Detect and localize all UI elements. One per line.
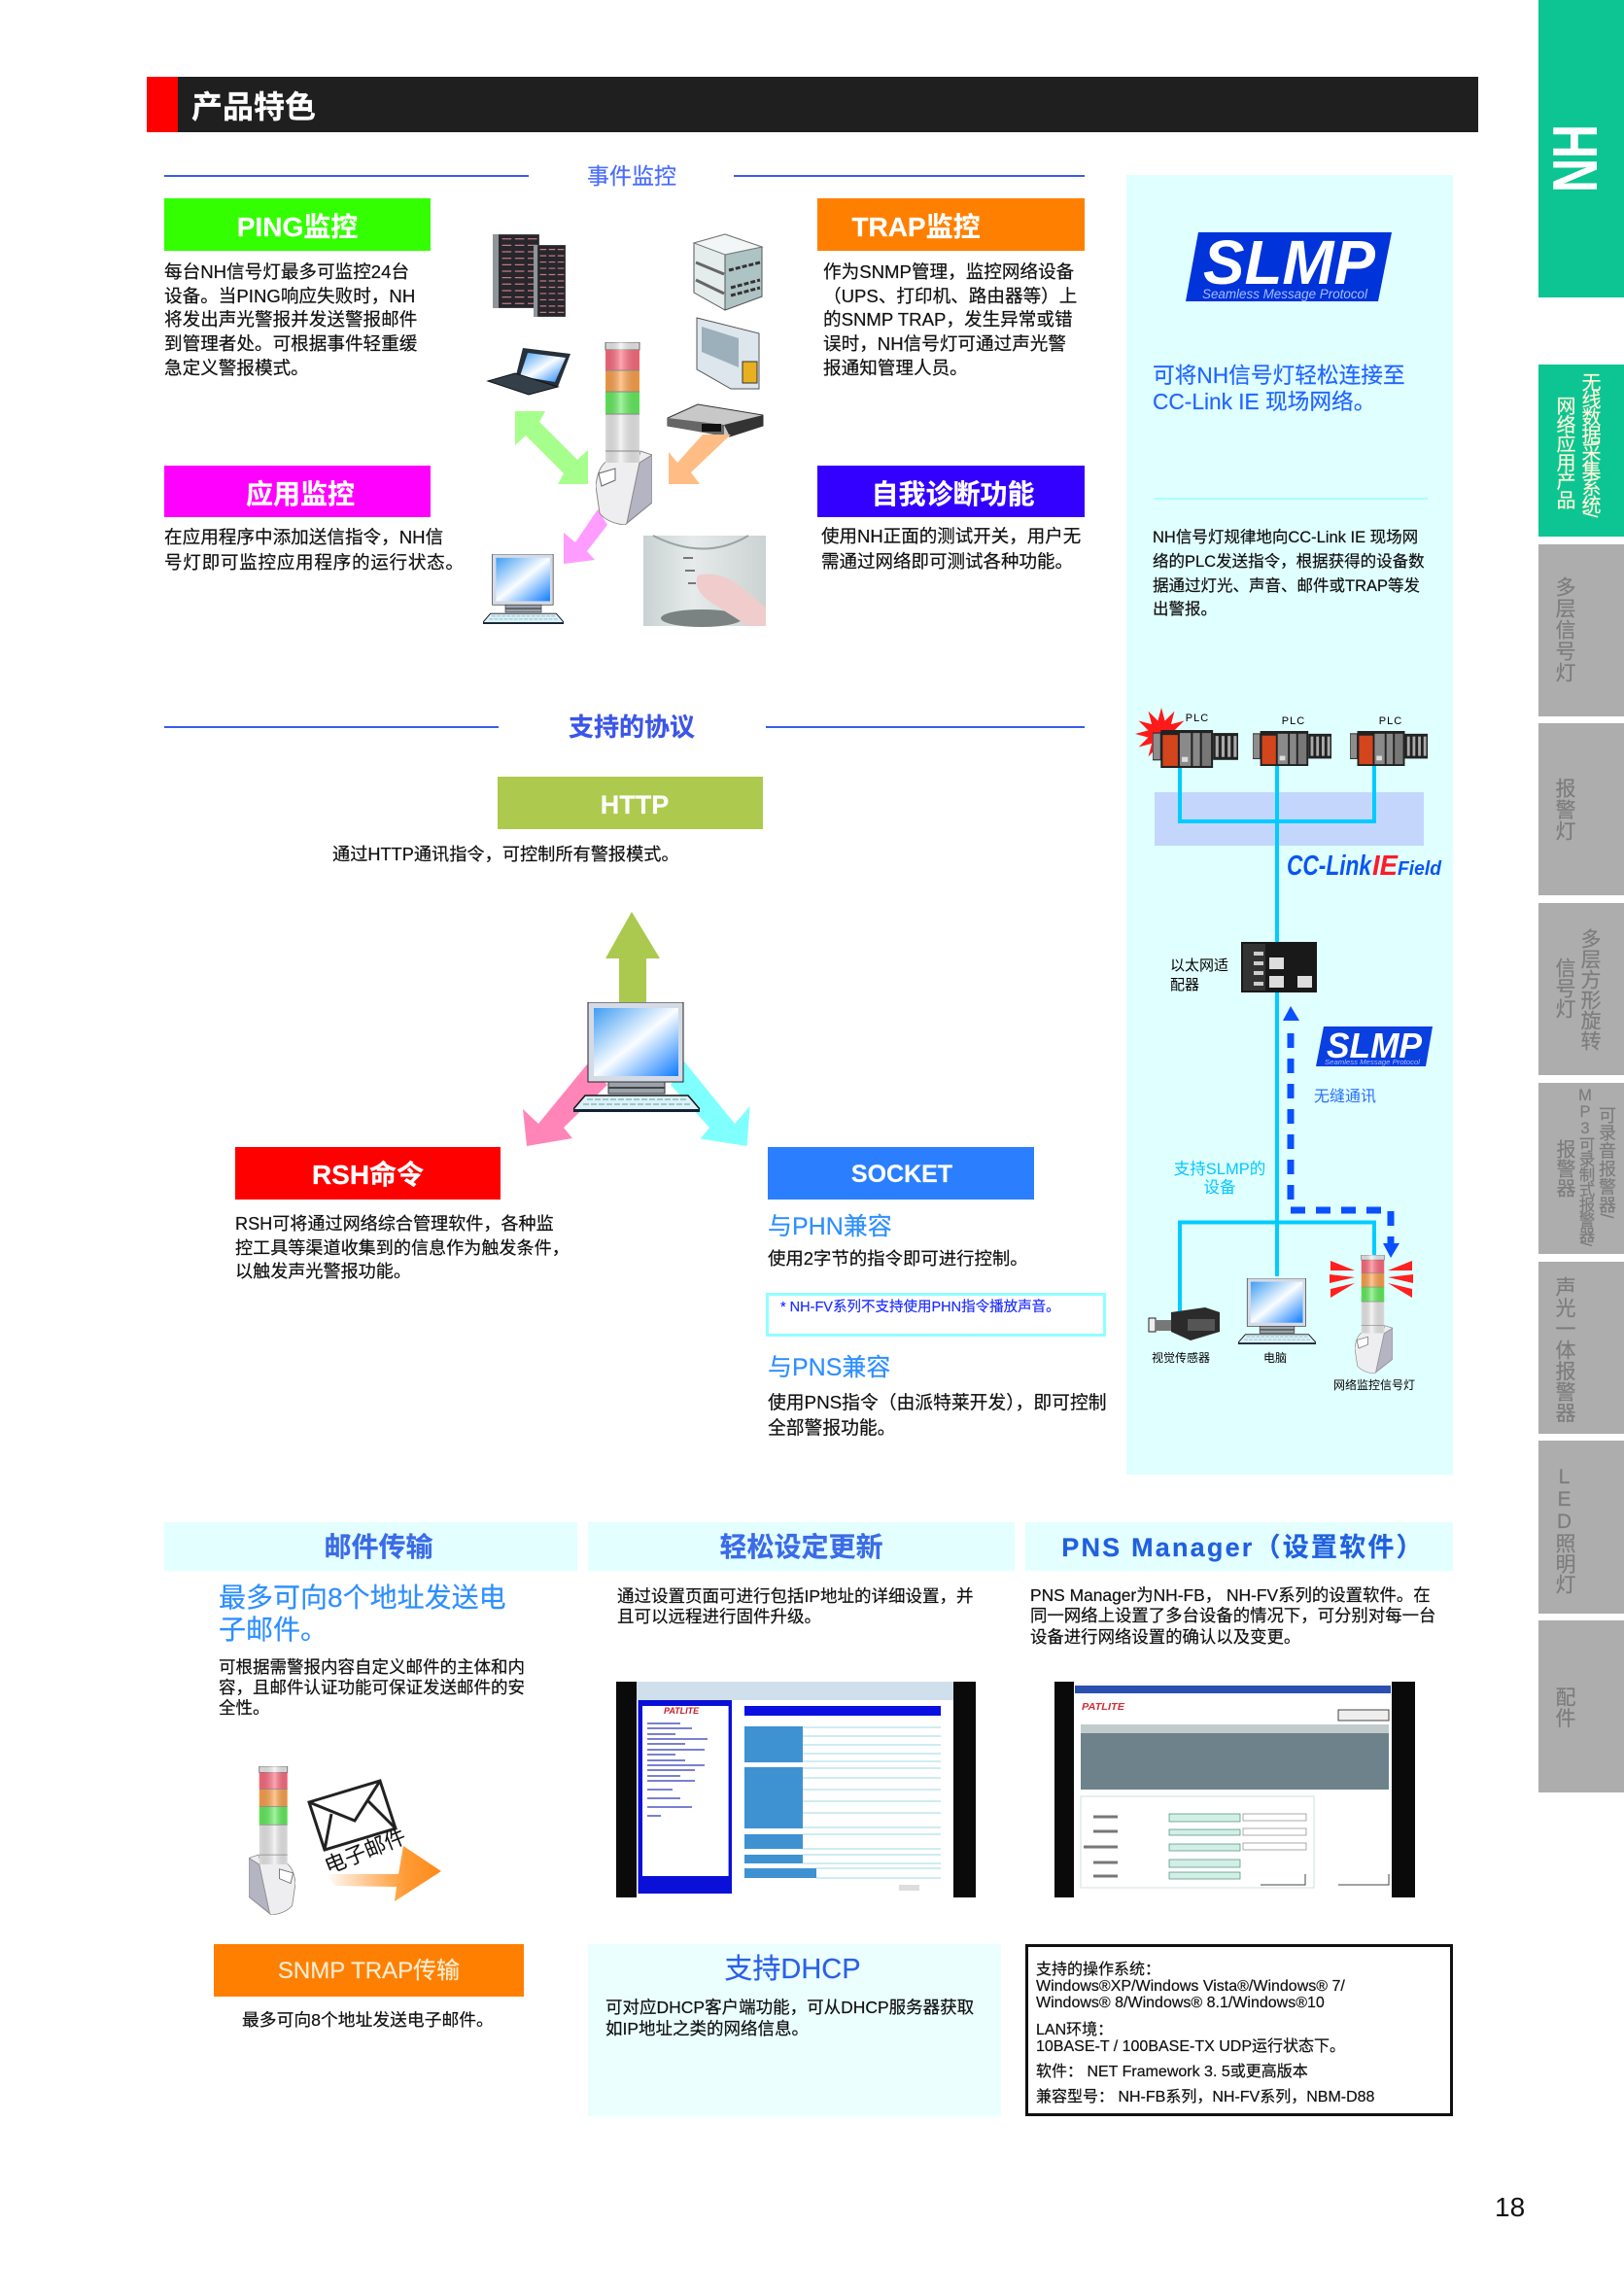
text: self diagnosis description: 使用NH正面的测试开关，用户无 — [821, 526, 1081, 546]
subheading: 支持的协议: 支持的协议 — [569, 713, 695, 742]
icon: envelope — [309, 1781, 396, 1850]
banner: SOCKET: SOCKET — [851, 1161, 952, 1188]
illustration: event monitoring diagram — [483, 233, 766, 627]
panel: SLMP — [1126, 175, 1453, 1475]
heading: 支持DHCP: 支持DHCP — [724, 1954, 861, 1985]
icon: network switch — [668, 404, 763, 436]
text: LAN environment — [1036, 2021, 1345, 2055]
logo: SLMP: Seamless Message Protocol — [1202, 287, 1368, 301]
arrow: double green — [515, 411, 588, 484]
tab: 配件 — [1538, 1620, 1624, 1792]
text: PING description: 将发出声光警报并发送警报邮件 — [164, 309, 417, 330]
banner: TRAP监控 — [817, 198, 1085, 251]
page number: 18 — [1495, 2192, 1525, 2222]
text: settings description: 且可以远程进行固件升级。 — [617, 1606, 821, 1625]
screenshot: web configuration page — [616, 1682, 976, 1897]
label: email: 电子邮件 — [321, 1824, 409, 1879]
icon: computer — [1238, 1278, 1316, 1344]
tab: 无线数据采集系统/网络应用产品: 网络应用产品 — [1553, 396, 1574, 508]
text: PING description: 设备。当PING响应失败时，NH — [164, 286, 415, 306]
tab: NH active — [1538, 0, 1624, 297]
text: PNS description — [768, 1392, 1107, 1438]
panel: HTTP — [332, 777, 763, 864]
heading: send to 8 addresses: 子邮件。 — [219, 1615, 328, 1645]
tab: 报警灯: 报警灯 — [1553, 778, 1575, 842]
logo: CC-Link IE Field: IE — [1372, 851, 1399, 882]
tab: 声光一体报警器 — [1538, 1262, 1624, 1434]
text: TRAP description — [823, 261, 1077, 378]
side navigation tabs — [1538, 0, 1624, 1792]
panel: system requirements — [1025, 1944, 1453, 2116]
image: finger pressing test switch — [643, 536, 766, 627]
banner: 应用监控: 应用监控 — [246, 479, 355, 509]
icon: server racks — [493, 234, 566, 317]
text: SLMP description — [1153, 529, 1425, 618]
text: PNS description: 使用PNS指令（由派特莱开发），即可控制 — [768, 1392, 1107, 1412]
tab: 多层方形旋转信号灯 — [1538, 903, 1624, 1075]
panel: RSH命令 — [235, 1147, 570, 1281]
tab: 报警灯 — [1538, 723, 1624, 895]
tab: MP3可录制式报警器: MP3 可录制式报警器/ — [1576, 1087, 1594, 1245]
header band — [588, 1522, 1015, 1571]
text: compatible models: 兼容型号： NH-FB系列，NH-FV系列，NBM-D88 — [1036, 2089, 1374, 2105]
panel: 支持DHCP — [588, 1944, 1001, 2116]
column: PNS Manager — [1025, 1522, 1453, 1647]
text: TRAP description: 的SNMP TRAP，发生异常或错 — [823, 309, 1073, 330]
logo: CC-Link IE Field: Field — [1398, 858, 1442, 880]
arrow: orange — [669, 435, 731, 484]
heading: connect to CC-Link IE — [1153, 363, 1405, 414]
text: supported OS — [1036, 1961, 1345, 2011]
section heading bar: 产品特色 — [147, 77, 1478, 132]
banner: HTTP: HTTP — [601, 790, 669, 819]
text: PHN description: 使用2字节的指令即可进行控制。 — [768, 1248, 1028, 1269]
arrow: dashed SLMP route — [1283, 1006, 1399, 1258]
screenshot: PNS Manager window: PATLITE — [1082, 1702, 1124, 1713]
icon: vision sensor — [1149, 1307, 1220, 1340]
tab: 无线数据采集系统/网络应用产品 — [1538, 365, 1624, 537]
text: email description: 可根据需警报内容自定义邮件的主体和内 — [219, 1657, 525, 1677]
tab: 多层信号灯: 多层信号灯 — [1553, 576, 1575, 683]
text: email description — [219, 1657, 525, 1718]
banner: 自我诊断功能: 自我诊断功能 — [871, 479, 1034, 509]
red marker — [147, 77, 178, 132]
tab: LED照明灯 — [1538, 1441, 1624, 1614]
label: ethernet adapter: 以太网适 — [1170, 957, 1228, 974]
heading: send to 8 addresses: 最多可向8个地址发送电 — [219, 1583, 506, 1613]
text: settings description — [617, 1586, 974, 1625]
label: ethernet adapter: 配器 — [1170, 977, 1199, 993]
text: DHCP description: 可对应DHCP客户端功能，可从DHCP服务器获取 — [605, 1998, 974, 2017]
text: PNS Manager description: 同一网络上设置了多台设备的情况下，可分别对每一台 — [1030, 1606, 1435, 1625]
heading: connect to CC-Link IE: 可将NH信号灯轻松连接至 — [1153, 363, 1405, 388]
text: email description: 容，且邮件认证功能可保证发送邮件的安 — [219, 1678, 525, 1697]
text: supported OS: Windows®XP/Windows Vista®/Windows® 7/ — [1036, 1978, 1345, 1995]
banner: SOCKET — [768, 1147, 1034, 1200]
column: 轻松设定更新 — [588, 1522, 1015, 2116]
label: network signal tower: 网络监控信号灯 — [1333, 1377, 1415, 1392]
PLC units: PLC — [1186, 713, 1209, 724]
text: SLMP description: 据通过灯光、声音、邮件或TRAP等发 — [1153, 577, 1420, 595]
heading: connect to CC-Link IE: CC-Link IE 现场网络。 — [1153, 389, 1375, 414]
note box — [766, 1293, 1106, 1337]
text: supported OS: Windows® 8/Windows® 8.1/Windows®10 — [1036, 1995, 1325, 2011]
text: PNS Manager description: 设备进行网络设置的确认以及变更。 — [1030, 1627, 1300, 1647]
heading: PNS compatible: 与PNS兼容 — [768, 1354, 890, 1381]
network diagram — [1135, 708, 1442, 1392]
tab: MP3可录制式报警器 — [1538, 1083, 1624, 1254]
text: SLMP description: 出警报。 — [1153, 601, 1217, 618]
banner: SNMP TRAP传输 — [214, 1944, 524, 1997]
text: self diagnosis description — [821, 526, 1081, 572]
text: TRAP description: （UPS、打印机、路由器等）上 — [823, 286, 1077, 306]
banner: 自我诊断功能 — [817, 466, 1085, 517]
header band: 邮件传输 — [324, 1532, 433, 1562]
icon: computer — [483, 554, 564, 624]
header band: 轻松设定更新 — [719, 1532, 882, 1562]
PLC units: PLC — [1379, 715, 1402, 727]
text: PNS description: 全部警报功能。 — [768, 1417, 895, 1438]
text: PNS Manager description — [1030, 1585, 1435, 1647]
text: DHCP description — [605, 1998, 974, 2038]
text: HTTP description: 通过HTTP通讯指令，可控制所有警报模式。 — [332, 845, 679, 864]
text: LAN environment: LAN环境： — [1036, 2022, 1113, 2038]
header band — [1025, 1522, 1453, 1571]
label: SLMP capable devices: 支持SLMP的 — [1174, 1160, 1265, 1178]
column: 邮件传输 — [164, 1522, 577, 2030]
network lines — [1180, 766, 1374, 1312]
logo: small SLMP: SLMP — [1327, 1026, 1423, 1065]
text: application monitoring description: 在应用程序中添加送信指令，NH信 — [164, 527, 443, 547]
banner: 应用监控 — [164, 466, 431, 517]
text: SLMP description: 络的PLC发送指令，根据获得的设备数 — [1153, 553, 1425, 571]
panel: 自我诊断功能 — [817, 466, 1085, 572]
illustration: tower sending email — [249, 1766, 441, 1915]
note box: * NH-FV系列不支持使用PHN指令播放声音。 — [780, 1300, 1060, 1315]
icon: signal tower — [249, 1766, 295, 1915]
icon: computer — [573, 1002, 700, 1112]
label: seamless communication: 无缝通讯 — [1314, 1088, 1376, 1105]
tab: LED照明灯: LED 照明灯 — [1553, 1466, 1575, 1594]
text: PING description: 到管理者处。可根据事件轻重缓 — [164, 333, 417, 354]
icon: network signal tower — [1355, 1255, 1393, 1374]
text: settings description: 通过设置页面可进行包括IP地址的详细设置，并 — [617, 1586, 974, 1606]
heading: send to 8 addresses — [219, 1583, 506, 1645]
text: email description: 全性。 — [219, 1698, 270, 1718]
text: SNMP TRAP description: 最多可向8个地址发送电子邮件。 — [242, 2010, 494, 2030]
text: RSH description: 以触发声光警报功能。 — [235, 1262, 411, 1281]
text: PING description: 每台NH信号灯最多可监控24台 — [164, 261, 409, 282]
icon: ethernet adapter — [1241, 942, 1317, 992]
tab: MP3可录制式报警器: 报警器 — [1553, 1139, 1574, 1198]
screenshot: PNS Manager window — [1054, 1682, 1415, 1897]
header band — [164, 1522, 577, 1571]
text: PNS Manager description: PNS Manager为NH-FB， NH-FV系列的设置软件。在 — [1030, 1585, 1431, 1605]
field network band — [1155, 792, 1424, 846]
label: SLMP capable devices: 设备 — [1203, 1178, 1236, 1197]
text: SLMP description: NH信号灯规律地向CC-Link IE 现场网 — [1153, 529, 1418, 546]
logo: CC-Link IE Field — [1287, 851, 1442, 882]
banner: RSH命令 — [235, 1147, 501, 1200]
text: PING description — [164, 261, 417, 378]
banner: RSH命令: RSH命令 — [312, 1160, 424, 1190]
text: software: 软件： NET Framework 3. 5或更高版本 — [1036, 2064, 1308, 2080]
icon: network signal tower — [596, 342, 652, 525]
tab: NH active: NH — [1539, 124, 1610, 192]
banner: TRAP监控: TRAP监控 — [851, 212, 981, 242]
text: RSH description: 控工具等渠道收集到的信息作为触发条件， — [235, 1238, 570, 1258]
text: application monitoring description — [164, 527, 465, 573]
banner: PING监控 — [164, 198, 431, 251]
panel: TRAP监控 — [817, 198, 1085, 378]
icon: alarm rays — [1330, 1261, 1413, 1298]
text: DHCP description: 如IP地址之类的网络信息。 — [605, 2019, 809, 2038]
banner: PING监控: PING监控 — [237, 212, 358, 242]
arrow: pink to RSH — [523, 1064, 607, 1146]
label: computer: 电脑 — [1263, 1351, 1287, 1365]
panel: SOCKET — [766, 1147, 1107, 1438]
text: supported OS: 支持的操作系统： — [1036, 1962, 1160, 1978]
text: PING description: 急定义警报模式。 — [164, 358, 309, 378]
text: TRAP description: 报通知管理人员。 — [823, 358, 968, 378]
tab: 配件: 配件 — [1553, 1687, 1575, 1728]
icon: UPS — [697, 318, 759, 389]
text: self diagnosis description: 需通过网络即可测试各种功能。 — [821, 551, 1073, 572]
label: vision sensor: 视觉传感器 — [1152, 1350, 1210, 1365]
heading: PHN compatible: 与PHN兼容 — [768, 1213, 892, 1240]
logo: small SLMP: Seamless Message Protocol — [1325, 1060, 1420, 1066]
title: 产品特色 — [191, 89, 316, 124]
text: RSH description — [235, 1214, 570, 1281]
arrow: cyan to SOCKET — [671, 1061, 750, 1146]
PLC units: PLC — [1282, 715, 1305, 727]
text: LAN environment: 10BASE-T / 100BASE-TX UDP运行状态下。 — [1036, 2038, 1345, 2055]
text: TRAP description: 误时，NH信号灯可通过声光警 — [823, 333, 1066, 354]
icon: printer — [694, 234, 762, 310]
panel: PING监控 — [164, 198, 431, 378]
protocol diagram — [523, 912, 750, 1146]
icon: alarm burst — [1135, 708, 1188, 760]
tab: 无线数据采集系统/网络应用产品: 无线数据采集系统/ — [1578, 372, 1600, 516]
banner: SNMP TRAP传输: SNMP TRAP传输 — [278, 1958, 460, 1984]
arrow: orange — [326, 1846, 441, 1901]
text: application monitoring description: 号灯即可监控应用程序的运行状态。 — [164, 552, 465, 573]
header band: PNS Manager（设置软件） — [1061, 1533, 1425, 1562]
tab: 多层方形旋转信号灯: 信号灯 — [1553, 957, 1575, 1019]
subheading: 事件监控: 事件监控 — [587, 163, 676, 189]
tab: 多层信号灯 — [1538, 544, 1624, 716]
arrow: pink — [564, 509, 607, 564]
tab: MP3可录制式报警器: 可录音报警器/ — [1597, 1106, 1616, 1219]
tab: 声光一体报警器: 声光一体报警器 — [1553, 1276, 1575, 1423]
banner: HTTP — [498, 777, 763, 829]
logo: SLMP: SLMP — [1203, 227, 1375, 297]
text: RSH description: RSH可将通过网络综合管理软件，各种监 — [235, 1214, 554, 1234]
tab: 多层方形旋转信号灯: 多层方形旋转 — [1578, 928, 1601, 1051]
PLC units — [1153, 713, 1428, 768]
arrow: up green — [605, 912, 660, 1004]
logo: CC-Link IE Field: CC-Link — [1287, 851, 1372, 882]
panel: 应用监控 — [164, 466, 465, 573]
screenshot: web configuration page: PATLITE — [664, 1706, 700, 1716]
icon: laptop — [488, 348, 570, 395]
text: TRAP description: 作为SNMP管理，监控网络设备 — [823, 261, 1074, 282]
